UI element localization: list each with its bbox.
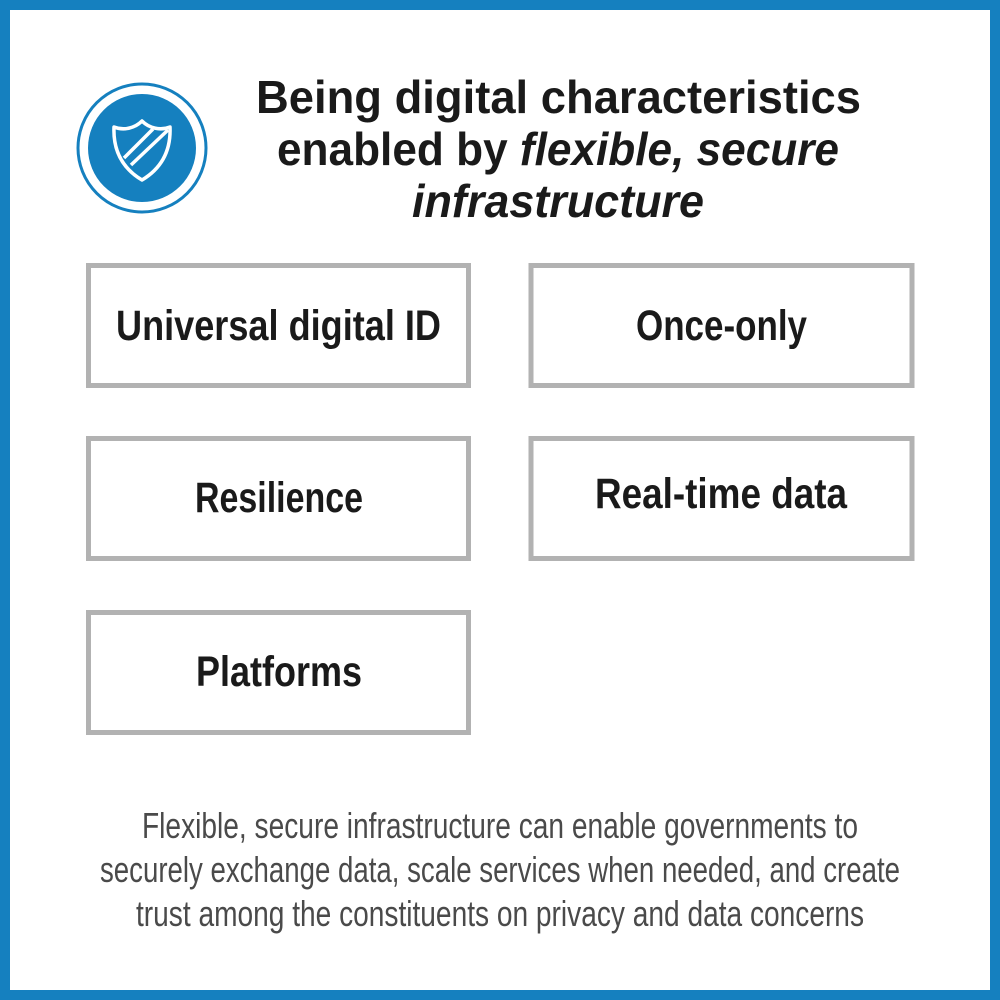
card: Platforms: Platforms	[196, 648, 362, 696]
title: Being digital characteristics	[256, 71, 861, 123]
card: Real-time data: Real-time data	[595, 470, 848, 518]
card: Resilience	[88, 438, 468, 558]
title: enabled by flexible, secure	[277, 123, 839, 175]
card: Universal digital ID	[88, 266, 468, 386]
card: Once-only	[531, 266, 912, 386]
title: infrastructure	[412, 175, 704, 227]
body text	[100, 805, 900, 934]
card: Resilience: Resilience	[195, 474, 363, 522]
icon: shield badge	[78, 84, 206, 212]
card: Real-time data	[531, 438, 912, 558]
card: Universal digital ID: Universal digital ID	[116, 302, 441, 350]
card: Platforms	[88, 612, 468, 732]
card: Once-only: Once-only	[636, 302, 807, 350]
title	[256, 71, 861, 227]
